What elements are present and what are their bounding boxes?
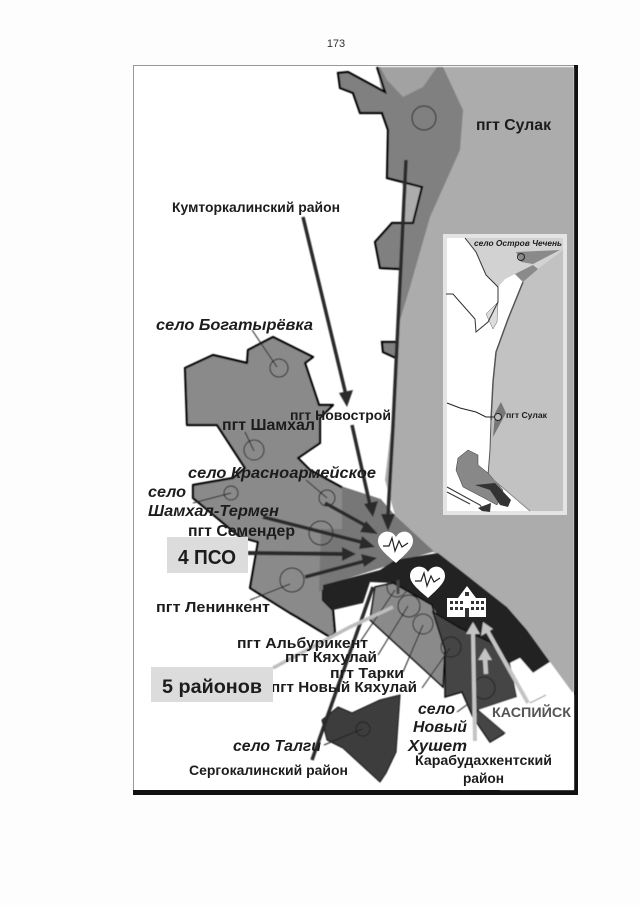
- label: Kyakhulay: пгт Кяхулай: [285, 649, 377, 666]
- label: Novostroy: пгт Новострой: [290, 407, 391, 423]
- coast white corner: [478, 658, 574, 790]
- label: Novy Khushet: село: [418, 701, 455, 718]
- inset label: Ostrov Chechen: село Остров Чечень: [474, 238, 562, 248]
- label: Tarki: пгт Тарки: [330, 665, 404, 682]
- arrow: Kumtorkala district: [303, 217, 378, 517]
- icon: heart 2: [410, 567, 445, 598]
- label: Karabudakhkent district: [415, 752, 552, 786]
- inset map: [443, 234, 567, 515]
- district: Sulak: [338, 67, 463, 358]
- callout: 4 PSO: 4 ПСО: [178, 547, 236, 569]
- map frame: [133, 65, 578, 795]
- south-central district: [370, 583, 445, 687]
- label: Novy Khushet: [407, 701, 468, 755]
- page number: 173: [327, 38, 345, 50]
- label: Novy Kyakhulay: пгт Новый Кяхулай: [271, 679, 417, 696]
- label: Semender: пгт Семендер: [188, 523, 295, 540]
- label: Novy Khushet: Новый: [413, 719, 468, 736]
- label: Krasnoarmeyskoe: село Красноармейское: [188, 465, 376, 482]
- label: Talgi: село Талги: [233, 738, 321, 755]
- black district: [323, 553, 550, 673]
- label: Bogatyrevka: село Богатырёвка: [156, 317, 313, 334]
- label: Shamkhal-Termen: [148, 484, 280, 520]
- callout: 4 PSO: [167, 537, 248, 573]
- short dark marker: [396, 580, 400, 594]
- label: Sulak: пгт Сулак: [476, 117, 551, 134]
- arrows: settlements to centre: [248, 503, 378, 577]
- darker zone: [320, 488, 432, 590]
- label: Alburikent: пгт Альбурикент: [237, 635, 368, 652]
- icon: hospital: [447, 586, 486, 617]
- callout: 5 districts: 5 районов: [162, 677, 262, 698]
- inset label: Sulak: пгт Сулак: [506, 410, 548, 420]
- Talgi district: [322, 695, 400, 782]
- arrow: five districts line: [273, 607, 393, 668]
- arrow: Sergokala line: [312, 587, 373, 760]
- label: Kaspiysk: КАСПИЙСК: [492, 703, 571, 720]
- label: Sergokala district: Сергокалинский район: [189, 762, 348, 778]
- Karabudakhkent district: [433, 612, 517, 742]
- arrows: to hospital: [466, 622, 528, 741]
- label: Novy Khushet: Хушет: [407, 738, 467, 755]
- district: Makhachkala north: [185, 337, 430, 637]
- arrow: Sulak to centre: [381, 160, 406, 531]
- label: Shamkhal-Termen: село: [148, 484, 186, 501]
- label: Karabudakhkent district: район: [463, 770, 504, 786]
- sea: [377, 67, 574, 692]
- icon: heart: [378, 532, 413, 563]
- settlement circles and leaders: [193, 330, 546, 745]
- map: [185, 67, 574, 790]
- label: Kumtorkala district: Кумторкалинский район: [172, 199, 340, 215]
- label: Shamkhal-Termen: Шамхал-Термен: [148, 503, 280, 520]
- label: Shamkhal: пгт Шамхал: [222, 417, 315, 434]
- callout: 5 districts: [151, 667, 273, 702]
- label: Leninkent: пгт Ленинкент: [156, 599, 270, 616]
- label: Karabudakhkent district: Карабудахкентский: [415, 752, 552, 768]
